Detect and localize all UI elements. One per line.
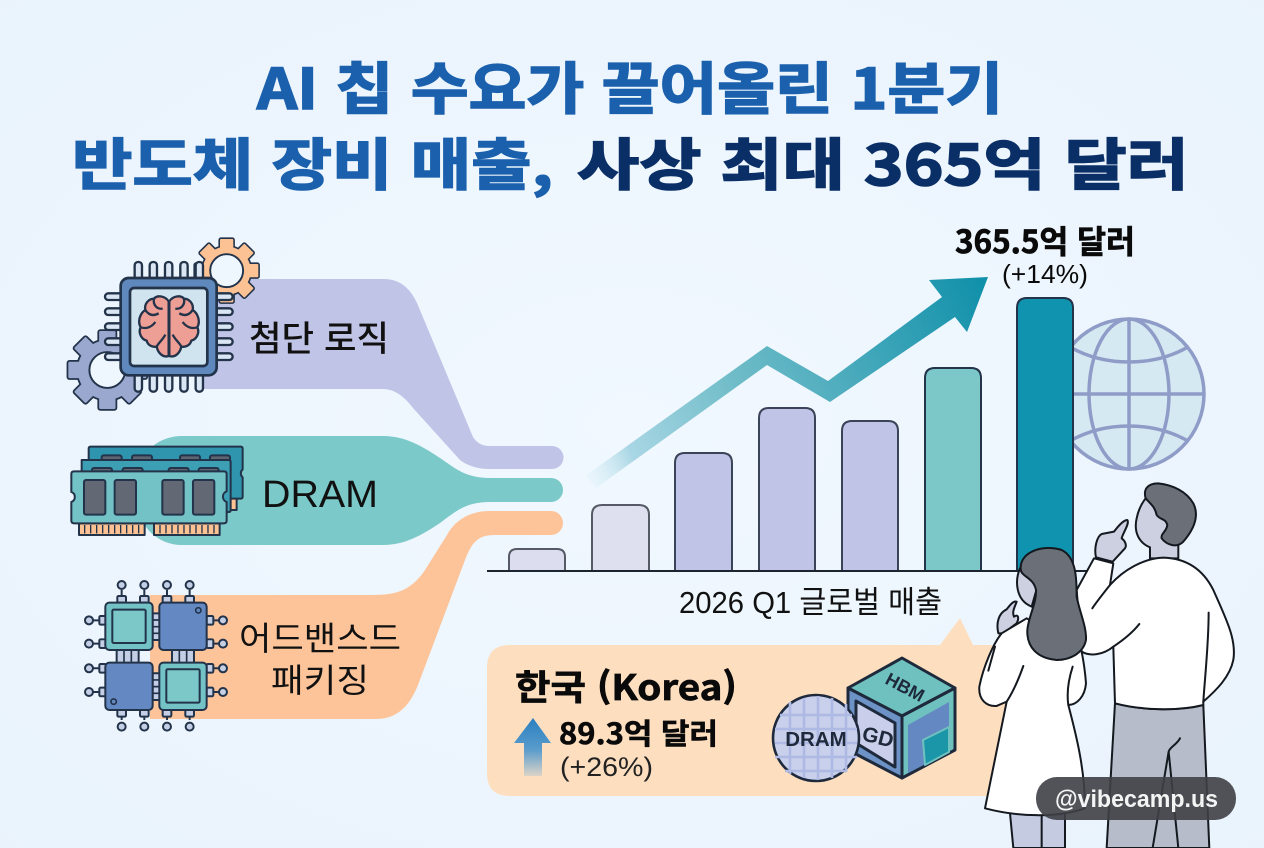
watermark pill xyxy=(1036,777,1236,820)
back module xyxy=(89,447,243,510)
bar 7 xyxy=(1017,298,1073,571)
woman legs xyxy=(1010,813,1065,848)
front module xyxy=(71,471,227,523)
watermark text: @vibecamp.us xyxy=(1055,786,1218,813)
GD text: GD xyxy=(860,723,896,752)
bar 3 xyxy=(675,453,732,571)
blue chip top-right xyxy=(159,603,207,650)
GD panel xyxy=(856,701,895,767)
man arm lines xyxy=(1092,585,1209,702)
HBM text: HBM xyxy=(882,669,928,706)
flow ribbon: advanced logic xyxy=(200,279,564,469)
bar chart xyxy=(487,298,1095,571)
woman coat xyxy=(979,618,1086,815)
chip pins xyxy=(105,262,233,392)
right face panel xyxy=(908,702,949,773)
woman xyxy=(979,548,1086,848)
chip body xyxy=(121,278,217,375)
woman leg divide xyxy=(1039,815,1045,848)
label: advanced logic: 첨단 로직 xyxy=(249,311,389,362)
title xyxy=(72,45,1189,202)
label: DRAM: DRAM xyxy=(262,474,378,516)
bar 5 xyxy=(842,421,898,571)
title line 2, blue part: 반도체 장비 매출, xyxy=(72,121,553,202)
bar 4 xyxy=(759,408,815,571)
man hand xyxy=(1095,520,1128,562)
cube right face xyxy=(902,688,955,778)
memory chips xyxy=(84,480,214,515)
cube left face xyxy=(848,688,902,778)
icon: AI chip with brain and gears xyxy=(68,239,258,409)
label line 2: 패키징 xyxy=(271,654,369,702)
cube top xyxy=(848,658,955,716)
woman sleeve lines xyxy=(988,647,1073,705)
blue chip bottom-left xyxy=(105,663,153,710)
woman face xyxy=(1017,568,1038,607)
woman hair xyxy=(1021,548,1086,660)
man neck and face xyxy=(1136,498,1178,558)
connector pads xyxy=(85,581,227,731)
icon: DRAM modules xyxy=(71,447,243,535)
callout bubble xyxy=(487,618,1010,796)
man pants xyxy=(1107,703,1209,848)
icon: up arrow xyxy=(514,718,551,776)
flow ribbon: advanced packaging xyxy=(150,511,563,719)
man hair xyxy=(1145,483,1196,545)
value label xyxy=(955,217,1135,289)
flow ribbon: DRAM xyxy=(142,436,563,545)
icon: orange gear xyxy=(195,239,258,302)
gold contacts xyxy=(79,523,220,535)
icon: blue gear xyxy=(68,331,146,409)
watermark xyxy=(1036,777,1236,820)
Korea value: 89.3억 달러 xyxy=(559,711,718,753)
total sales value: 365.5억 달러 xyxy=(955,217,1135,263)
chart baseline xyxy=(487,570,1095,572)
icon: advanced packaging chips xyxy=(85,581,227,731)
Korea heading: 한국 (Korea) xyxy=(515,660,737,711)
label line 1: 어드밴스드 xyxy=(239,612,401,660)
bar 2 xyxy=(592,505,649,571)
title line 2, navy part: 사상 최대 365억 달러 xyxy=(577,121,1189,202)
chip inner die xyxy=(130,288,207,366)
teal chip top-left xyxy=(105,603,153,650)
icon: DRAM wafer: DRAM xyxy=(785,728,847,751)
teal chip bottom-right xyxy=(159,663,207,710)
bar 1 xyxy=(509,549,565,571)
label: advanced packaging xyxy=(239,612,401,702)
panel: Korea callout xyxy=(487,618,1010,796)
middle module xyxy=(82,460,231,512)
icon: HBM cube xyxy=(848,658,955,778)
interconnect leads xyxy=(117,613,194,700)
icon: brain xyxy=(139,296,199,356)
icon: DRAM wafer xyxy=(773,695,859,781)
man xyxy=(1077,483,1234,848)
chart caption: 2026 Q1 글로벌 매출 xyxy=(679,585,942,620)
illustration: two people xyxy=(979,483,1234,848)
title line 1: AI 칩 수요가 끌어올린 1분기 xyxy=(256,45,1003,126)
growth arrow xyxy=(585,277,988,488)
right face inset xyxy=(923,727,949,765)
man leg divide xyxy=(1153,738,1180,848)
Korea growth: (+26%) xyxy=(560,752,653,782)
bar 6 xyxy=(925,368,981,571)
icon: globe xyxy=(1054,319,1204,469)
woman hand xyxy=(997,602,1018,633)
man torso xyxy=(1077,558,1234,709)
growth rate: (+14%) xyxy=(1002,259,1088,289)
